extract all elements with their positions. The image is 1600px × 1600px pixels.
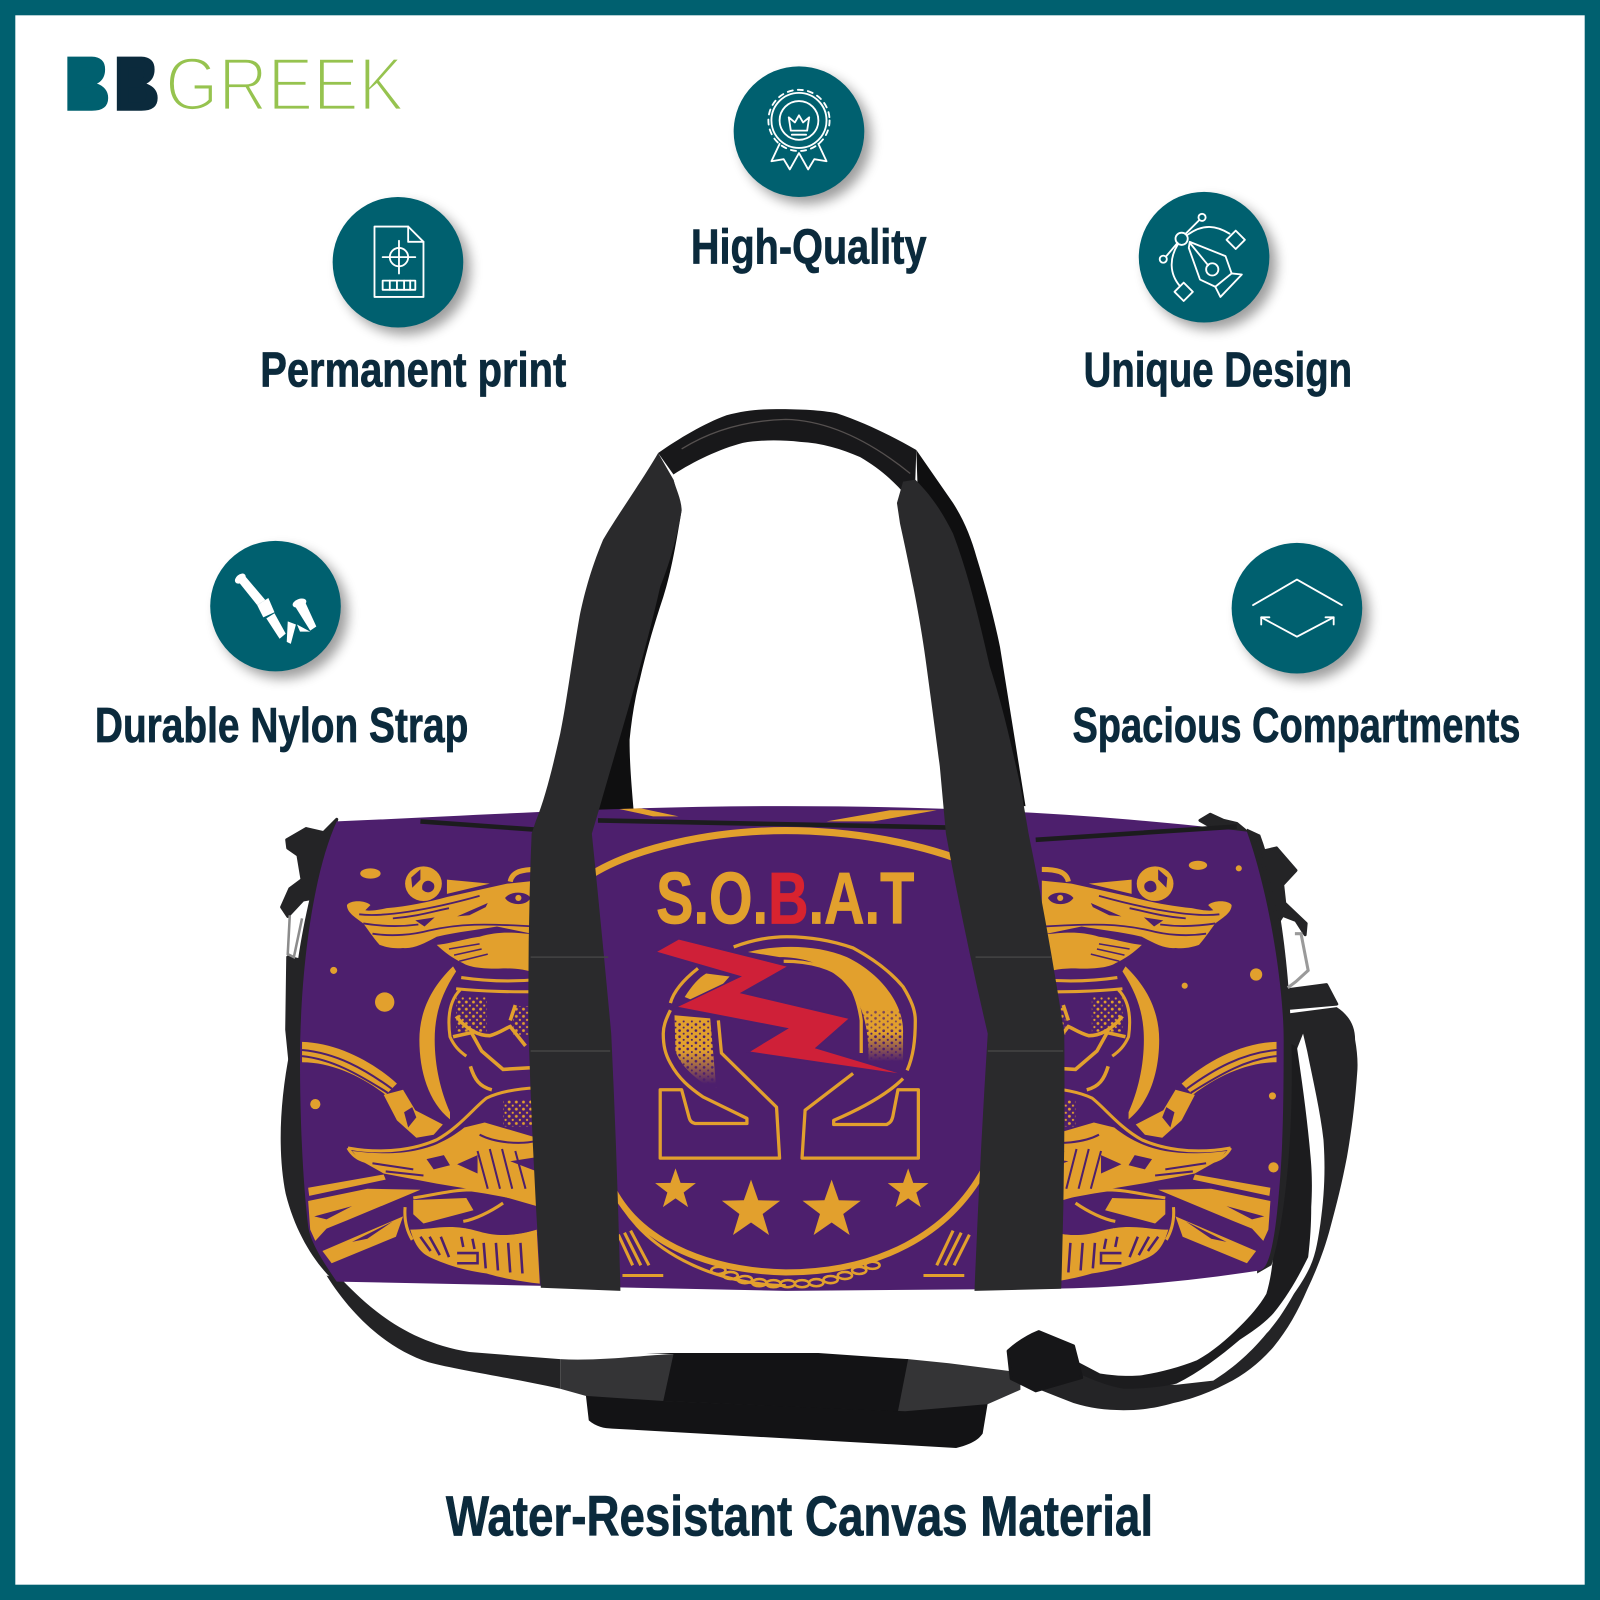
product photo: duffel bag bbox=[281, 409, 1358, 1448]
shoulder pad bbox=[560, 1353, 1020, 1448]
icon: permanent print bbox=[333, 197, 470, 335]
strap slider bbox=[1008, 1332, 1082, 1391]
bag body bbox=[300, 806, 1284, 1291]
chain bbox=[711, 1262, 880, 1287]
icon: high quality badge bbox=[734, 66, 871, 204]
heading: Durable Nylon Strap: Durable Nylon Strap bbox=[95, 699, 468, 753]
icon: unique design pen tool bbox=[1139, 192, 1277, 330]
gold crossing lines bbox=[615, 808, 937, 821]
left carabiner bbox=[288, 915, 302, 957]
shoulder strap left run bbox=[327, 1276, 560, 1389]
four stars bbox=[655, 1168, 929, 1235]
strap stitching bbox=[531, 957, 1063, 1051]
zipper bbox=[420, 820, 1237, 840]
grab handle bbox=[658, 409, 916, 497]
icon: durable nylon strap bbox=[210, 541, 348, 679]
logo: BB Greek bbox=[67, 43, 404, 127]
logo: BB Greek: B bbox=[116, 43, 157, 126]
right strap bbox=[897, 480, 1064, 1291]
lower hatching bbox=[618, 1231, 969, 1276]
side artwork bbox=[302, 808, 1279, 1287]
caption: Water-Resistant Canvas Material: Water-Resistant Canvas Material bbox=[446, 1485, 1153, 1548]
heading: Unique Design: Unique Design bbox=[1084, 344, 1352, 398]
heading: Permanent print: Permanent print bbox=[260, 344, 566, 398]
emblem ring top bbox=[587, 831, 974, 878]
heading: High-Quality: High-Quality bbox=[691, 220, 927, 274]
lightning bolt bbox=[655, 939, 908, 1076]
logo: BB Greek: B bbox=[67, 43, 108, 126]
emblem title: S.O.B.A.T bbox=[656, 856, 914, 939]
shoulder strap right run inner bbox=[1079, 1041, 1312, 1389]
right carabiner bbox=[1288, 934, 1308, 988]
right hardware and rim bbox=[1200, 814, 1337, 1273]
grab handle back straps bbox=[597, 450, 1026, 811]
emblem ring bottom bbox=[608, 1168, 985, 1272]
logo: BB Greek: GREEK bbox=[165, 43, 404, 127]
shoulder strap right run outer bbox=[1040, 1007, 1358, 1410]
left hardware and rim bbox=[281, 819, 347, 1284]
omega symbol bbox=[660, 937, 918, 1158]
left strap bbox=[528, 453, 682, 1291]
icon: spacious compartments bbox=[1232, 543, 1369, 681]
